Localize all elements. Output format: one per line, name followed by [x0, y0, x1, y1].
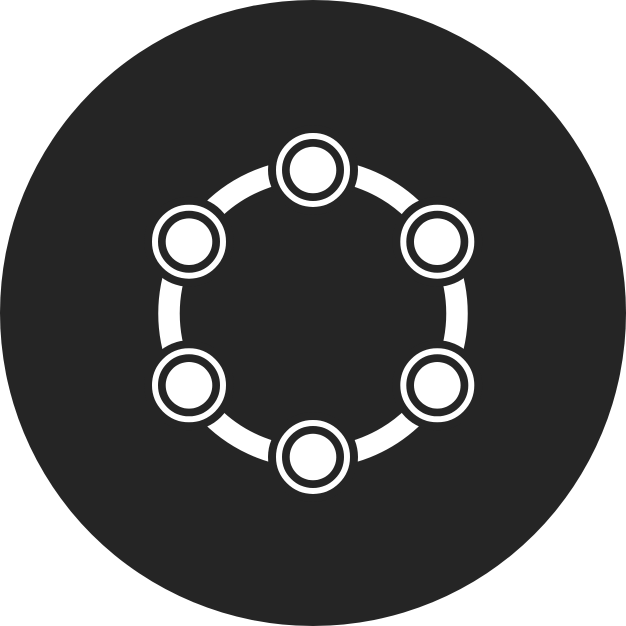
node: lower right	[403, 351, 471, 419]
node: upper right	[403, 208, 471, 276]
node: lower left	[155, 351, 223, 419]
connecting ring segments	[144, 125, 482, 502]
node: top	[279, 136, 347, 204]
node: upper left	[155, 208, 223, 276]
node: bottom	[279, 423, 347, 491]
